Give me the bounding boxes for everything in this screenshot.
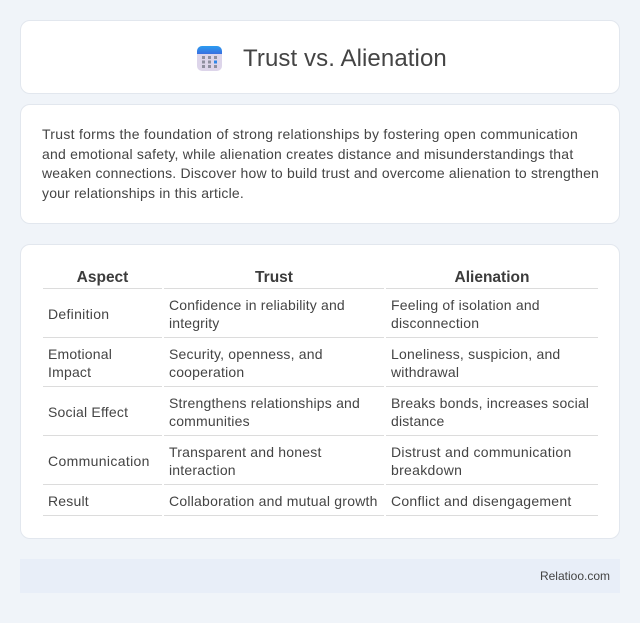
comparison table <box>43 269 598 516</box>
row: Definition: Confidence in reliability and <box>169 297 345 313</box>
row: Emotional Impact <box>48 346 560 380</box>
intro text: your relationships in this article. <box>42 184 244 200</box>
row: Social Effect: communities <box>169 413 250 429</box>
row: Definition: Definition <box>48 306 109 322</box>
row: Definition <box>48 297 540 331</box>
row: Communication: breakdown <box>391 462 462 478</box>
row: Social Effect <box>48 395 589 429</box>
row: Communication: interaction <box>169 462 236 478</box>
row: Social Effect: Strengthens relationships and <box>169 395 360 411</box>
intro text: and emotional safety, while alienation creates distance and misunderstandings that <box>42 146 573 162</box>
row: Social Effect: Breaks bonds, increases social <box>391 395 589 411</box>
footer text: Relatioo.com <box>540 569 610 583</box>
row: Definition: integrity <box>169 315 219 331</box>
intro text: Trust forms the foundation of strong relationships by fostering open communication <box>42 126 578 142</box>
row: Emotional Impact: withdrawal <box>391 364 459 380</box>
heading: Trust vs. Alienation <box>243 45 447 72</box>
header: Alienation: Alienation <box>455 269 529 286</box>
header: Aspect: Aspect <box>77 269 128 286</box>
row: Definition: Feeling of isolation and <box>391 297 540 313</box>
footer bar <box>20 559 620 593</box>
row: Communication: Distrust and communication <box>391 444 572 460</box>
row: Communication <box>48 444 572 478</box>
row: Result <box>48 493 572 509</box>
row: Emotional Impact: Loneliness, suspicion, and <box>391 346 560 362</box>
intro card <box>20 104 620 224</box>
row: Social Effect: distance <box>391 413 445 429</box>
row: Emotional Impact: Security, openness, and <box>169 346 323 362</box>
header: Trust: Trust <box>255 269 293 286</box>
row: Communication: Transparent and honest <box>169 444 322 460</box>
row: Emotional Impact: Emotional <box>48 346 112 362</box>
row: Emotional Impact: cooperation <box>169 364 244 380</box>
row: Result: Result <box>48 493 89 509</box>
row: Social Effect: Social Effect <box>48 404 128 420</box>
row: Result: Conflict and disengagement <box>391 493 572 509</box>
row: Definition: disconnection <box>391 315 479 331</box>
intro text <box>42 126 599 201</box>
row: Communication: Communication <box>48 453 150 469</box>
row: Result: Collaboration and mutual growth <box>169 493 378 509</box>
intro text: weaken connections. Discover how to build trust and overcome alienation to strengthen <box>42 165 599 181</box>
table card <box>20 244 620 539</box>
icon: calendar <box>197 46 222 71</box>
row: Emotional Impact: Impact <box>48 364 91 380</box>
title card <box>20 20 620 94</box>
